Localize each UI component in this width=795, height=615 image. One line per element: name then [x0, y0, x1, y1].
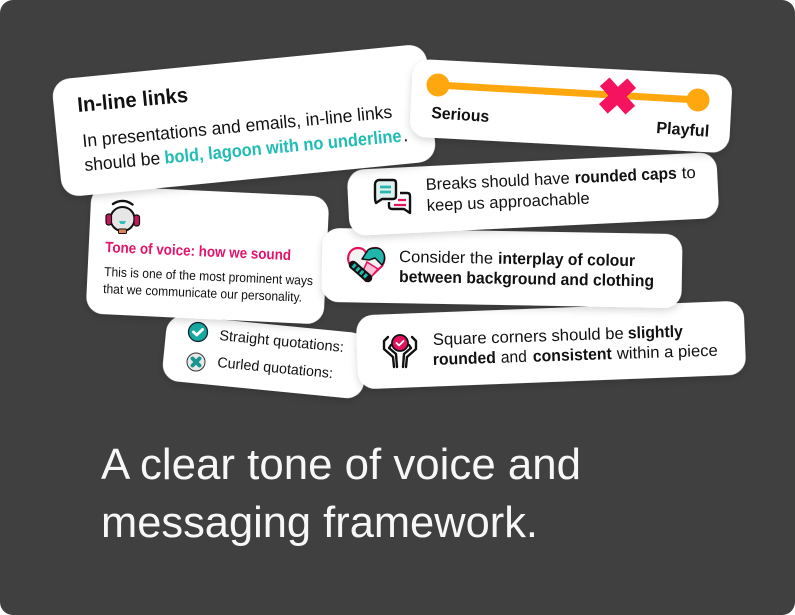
- text: tone line 2: that we communicate our personality.: [103, 281, 302, 305]
- panel: breaks card: [347, 152, 719, 236]
- text: square corners line 1: [433, 323, 684, 349]
- text: square corners line 2: within a piece: [616, 342, 718, 363]
- text: square corners line 1: Square corners should be: [433, 325, 624, 349]
- panel: tone of voice card: [86, 185, 329, 325]
- panel: quotation marks card: [161, 314, 369, 400]
- text: in-line links line 2: bold, lagoon with no underline: [164, 126, 402, 168]
- text: square corners line 2: [433, 342, 718, 369]
- icon: scale marker cross: [603, 82, 632, 110]
- icon: heart handshake: [348, 248, 384, 281]
- title: A clear tone of voice and: [101, 441, 581, 489]
- text: in-line links line 1: In presentations and emails, in-line links: [81, 102, 393, 151]
- text: square corners line 2: and: [501, 348, 527, 367]
- panel: serious to playful scale card: [409, 59, 733, 153]
- icon: speech bubbles: [375, 180, 410, 213]
- text: colour interplay line 1: [399, 248, 636, 270]
- label: serious: Serious: [431, 104, 490, 126]
- text: curled quotations: Curled quotations:: [217, 355, 334, 382]
- label: playful: Playful: [656, 119, 710, 141]
- icon: curled quotations cross: [187, 353, 205, 371]
- panel: square corners card: [356, 301, 746, 389]
- title: messaging framework.: [101, 499, 538, 547]
- text: straight quotations: Straight quotations:: [219, 328, 345, 356]
- text: colour interplay line 1: Consider the: [399, 248, 493, 268]
- text: breaks line 1: rounded caps: [574, 165, 677, 187]
- icon: headset: [106, 201, 140, 234]
- text: breaks line 1: Breaks should have: [425, 169, 570, 194]
- text: tone line 1: This is one of the most prominent ways: [104, 264, 314, 288]
- panel: in-line links card: [51, 43, 437, 198]
- text: square corners line 2: rounded: [433, 349, 496, 369]
- text: breaks line 1: to: [681, 164, 696, 182]
- scale track: [426, 74, 710, 112]
- icon: straight quotations check: [188, 322, 208, 342]
- text: colour interplay line 2: between background and clothing: [399, 268, 654, 290]
- text: in-line links line 2: should be: [84, 148, 161, 175]
- text: breaks line 2: keep us approachable: [426, 190, 590, 215]
- text: in-line links line 2: .: [402, 125, 409, 145]
- heading: tone of voice: Tone of voice: how we sound: [105, 239, 291, 264]
- text: in-line links line 2: [84, 125, 409, 175]
- text: colour interplay line 1: interplay of colour: [498, 250, 636, 270]
- text: square corners line 2: consistent: [533, 345, 613, 366]
- icon: hands holding check: [384, 335, 416, 367]
- text: square corners line 1: slightly: [628, 323, 684, 342]
- heading: in-line links: In-line links: [76, 84, 189, 117]
- panel: colour interplay card: [321, 228, 683, 308]
- text: breaks line 1: [425, 164, 696, 194]
- title: [101, 441, 581, 547]
